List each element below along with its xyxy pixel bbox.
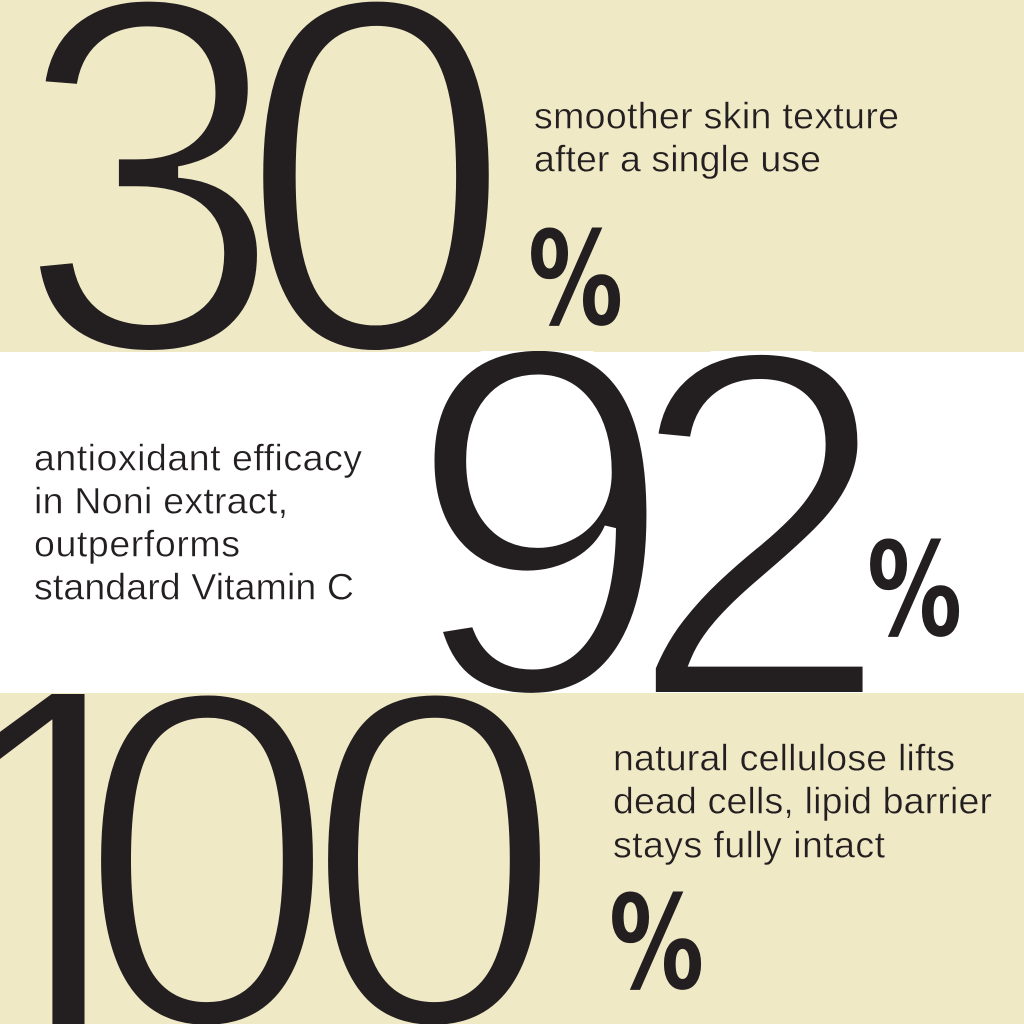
panel: 100 percent	[0, 693, 1024, 1024]
big number 92	[434, 351, 863, 693]
description 92: in Noni extract,	[34, 480, 288, 522]
description 92: standard Vitamin C	[34, 566, 354, 608]
percent sign 100: %	[609, 867, 704, 1019]
big number 30	[40, 2, 489, 350]
description 100: dead cells, lipid barrier	[613, 780, 992, 822]
description 100	[613, 736, 992, 866]
description 92: antioxidant efficacy	[34, 436, 362, 478]
percent sign 92: %	[867, 514, 962, 666]
big number 100	[0, 694, 540, 1024]
description 30: after a single use	[534, 138, 821, 180]
description 30	[534, 94, 899, 180]
description 92	[34, 436, 362, 608]
panel: 30 percent	[0, 0, 1024, 352]
panel: 92 percent	[35, 351, 960, 693]
percent sign 30: %	[528, 203, 623, 355]
description 100: natural cellulose lifts	[613, 736, 955, 778]
description 30: smoother skin texture	[534, 94, 899, 136]
big number 92: 9	[406, 243, 675, 801]
description 92: outperforms	[34, 522, 240, 564]
big number 92: 2	[626, 246, 892, 804]
description 100: stays fully intact	[613, 824, 886, 866]
